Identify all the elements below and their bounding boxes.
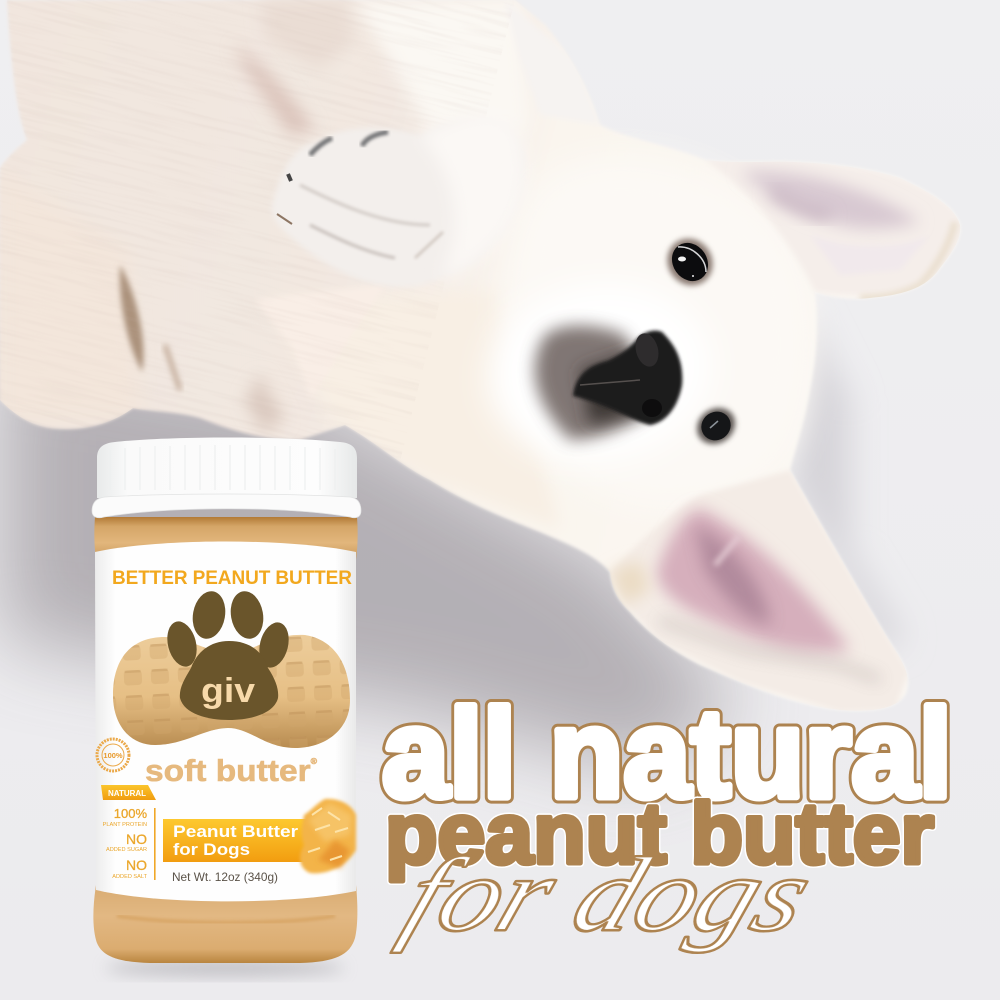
muzzle: [477, 269, 723, 475]
banner: peanut butter for dogs: Peanut Butter: [173, 822, 298, 841]
jar label: [95, 542, 356, 901]
banner: peanut butter for dogs: for Dogs: [173, 840, 250, 859]
dog shadow on floor: [0, 300, 905, 976]
tag: natural: NATURAL: [108, 789, 146, 798]
chest tuft: [255, 285, 385, 398]
illustration: white puppy lying on its back: [0, 0, 965, 712]
claims list: NO: [126, 857, 147, 873]
claims list: ADDED SALT: [112, 874, 148, 880]
headline: peanut butter: peanut butter: [385, 786, 934, 882]
claims list: PLANT PROTEIN: [103, 822, 147, 828]
icon: lower eye: [690, 401, 742, 451]
headline: peanut butter: peanut butter: [385, 786, 934, 882]
net weight: Net Wt. 12oz (340g): [172, 870, 278, 884]
fur shading: [0, 0, 600, 569]
white cap: [92, 438, 361, 518]
icon: nose: [573, 331, 682, 425]
headline: all natural: all natural: [382, 683, 952, 824]
product: peanut butter jar: [92, 438, 361, 963]
tag: natural: [101, 785, 156, 800]
dark muzzle hair: [535, 326, 655, 440]
claims list: ADDED SUGAR: [106, 847, 147, 853]
giv wordmark: giv: [201, 672, 255, 710]
product name: soft butter: [145, 753, 298, 788]
claims list: 100%: [114, 806, 147, 821]
butter behind the cap: [94, 517, 358, 560]
claims list: [103, 806, 148, 880]
front paw: [272, 112, 525, 287]
label headline: BETTER PEANUT BUTTER: [112, 568, 352, 589]
icon: peanut: [113, 634, 350, 748]
script tagline: for dogs: for dogs: [390, 835, 828, 953]
upper ear: [705, 159, 965, 298]
script tagline: for dogs: for dogs: [390, 835, 828, 953]
logo: paw with giv: [163, 589, 293, 720]
head: [477, 156, 813, 508]
jar base butter: [93, 885, 357, 963]
headline: all natural: all natural: [382, 683, 952, 824]
claims list: NO: [126, 831, 147, 847]
product name: ®: [311, 757, 317, 766]
lower ear: [610, 470, 909, 712]
dog silhouette: [0, 0, 960, 711]
icon: upper eye: [658, 230, 722, 294]
icon: honeycomb: [300, 799, 356, 873]
banner: peanut butter for dogs: [163, 819, 308, 862]
badge: 100% human grade: [97, 739, 129, 771]
badge: 100% human grade: 100%: [103, 751, 123, 760]
